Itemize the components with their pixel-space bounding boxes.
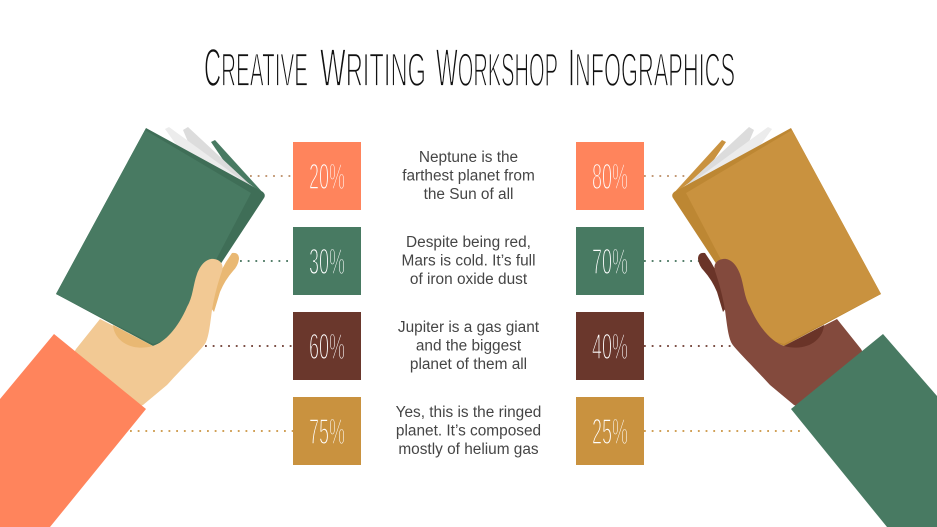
illustration: right hand holding yellow book: [672, 127, 937, 527]
80%: 80%: [592, 156, 628, 197]
text: Neptune: the Sun of all: [424, 186, 513, 203]
text: Mars: of iron oxide dust: [410, 271, 528, 288]
25%: [576, 397, 644, 465]
text: Saturn: Yes, this is the ringed: [396, 404, 541, 421]
text: Neptune: Neptune is the: [419, 149, 518, 166]
20%: 20%: [309, 156, 345, 197]
pages: [679, 127, 754, 192]
text: Jupiter: Jupiter is a gas giant: [398, 319, 540, 336]
text: Mars: Mars is cold. It’s full: [402, 252, 536, 270]
title: CREATIVE: [204, 38, 308, 98]
30%: [293, 227, 361, 295]
75%: [293, 397, 361, 465]
right dotted connectors: [644, 176, 805, 431]
far finger: [698, 253, 732, 312]
pages: [183, 127, 258, 192]
80%: [576, 142, 644, 210]
70%: 70%: [592, 241, 628, 282]
75%: 75%: [309, 411, 345, 452]
back cover: [672, 140, 726, 195]
text: INFOGRAPHICS: [568, 38, 735, 98]
orange sleeve: [0, 334, 146, 527]
text: Jupiter: planet of them all: [410, 356, 527, 373]
40%: 40%: [592, 326, 628, 367]
title: WORKSHOP: [436, 38, 558, 98]
palm shadow: [113, 325, 153, 348]
20%: [293, 142, 361, 210]
text: Neptune: farthest planet from: [402, 168, 535, 184]
text: Jupiter: [398, 319, 540, 373]
left dotted connectors: [130, 176, 293, 431]
text: Mars: [402, 234, 536, 288]
green sleeve: [791, 334, 937, 527]
text: Mars: Despite being red,: [406, 234, 531, 251]
60%: 60%: [309, 326, 345, 367]
text: Saturn: mostly of helium gas: [398, 441, 539, 458]
40%: [576, 312, 644, 380]
far finger: [205, 253, 239, 312]
right percentage squares: [576, 142, 644, 465]
30%: 30%: [309, 241, 345, 282]
left percentage squares: [293, 142, 361, 465]
60%: [293, 312, 361, 380]
illustration: left hand holding green book: [0, 127, 265, 527]
book cover: [672, 128, 881, 346]
25%: 25%: [592, 411, 628, 452]
text: Saturn: planet. It’s composed: [396, 422, 541, 440]
70%: [576, 227, 644, 295]
back cover: [211, 140, 265, 195]
palm shadow: [784, 325, 824, 348]
book cover: [56, 128, 265, 346]
title: [204, 38, 735, 98]
mirrored book and hand: [672, 127, 881, 410]
text: Saturn: [396, 404, 541, 458]
hand: [714, 259, 867, 410]
hand: [70, 259, 223, 410]
text: Neptune: [402, 149, 535, 203]
text: Jupiter: and the biggest: [416, 338, 522, 354]
title: WRITING: [320, 38, 426, 98]
